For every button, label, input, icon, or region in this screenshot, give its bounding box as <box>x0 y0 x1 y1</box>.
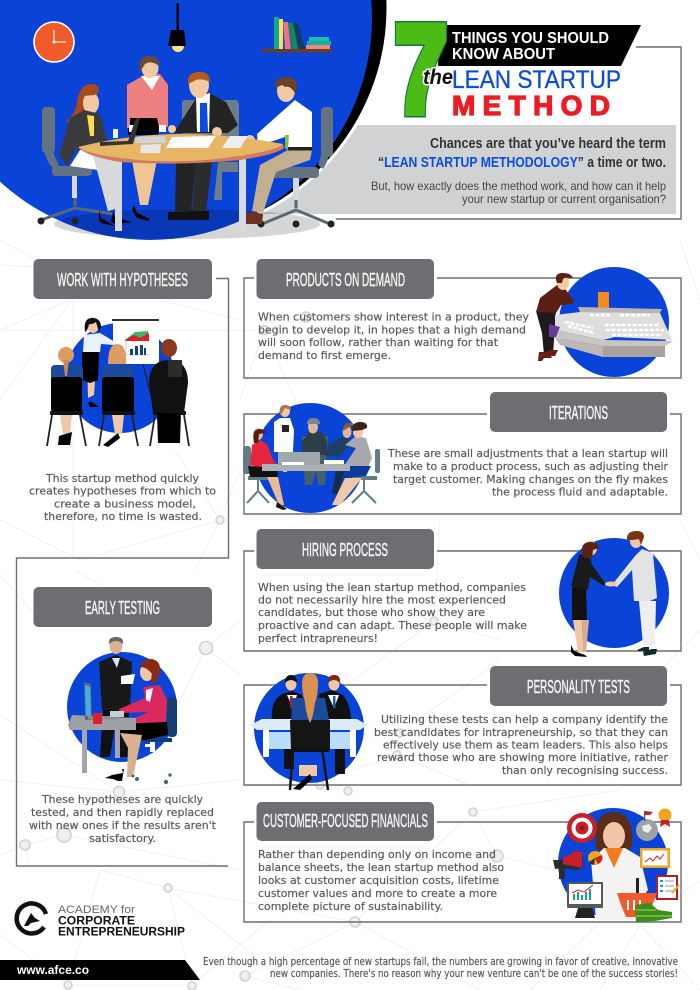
intro headline: Chances are that you’ve heard the term <box>430 136 666 152</box>
title banner: THINGS YOU SHOULD <box>452 30 609 47</box>
text: looks at customer acquisition costs, lifetime <box>258 874 499 887</box>
panel: iterations <box>243 392 681 514</box>
the script: the <box>423 66 453 89</box>
method: METHOD <box>452 90 610 121</box>
big seven: 7 <box>395 1 447 139</box>
website bar: www.afce.co <box>16 963 89 977</box>
text: therefore, no time is wasted. <box>44 510 202 523</box>
heading <box>256 529 434 569</box>
hero black arc <box>0 0 388 236</box>
text <box>374 713 668 777</box>
text: reward those who are showing more initiative, rather <box>377 751 668 764</box>
standing woman in pink <box>127 56 168 221</box>
intro question: your new startup or current organisation? <box>462 192 666 206</box>
panel: work with hypotheses <box>16 259 228 866</box>
text: with new ones if the results aren't <box>29 819 217 832</box>
icon: team meeting <box>243 403 380 513</box>
text: best candidates for intrapreneurship, so that they can <box>374 726 668 739</box>
heading <box>490 666 667 706</box>
intro headline <box>378 136 666 171</box>
heading: EARLY TESTING <box>85 598 160 618</box>
intro question <box>371 179 666 206</box>
panel: hiring process <box>244 529 681 657</box>
hero blue circle <box>0 0 372 240</box>
text: This startup method quickly <box>45 472 199 485</box>
intro question: But, how exactly does the method work, and how can it help <box>371 179 666 193</box>
wall clock <box>34 22 74 62</box>
icon: shopper at display <box>536 267 673 377</box>
heading: WORK WITH HYPOTHESES <box>57 270 188 290</box>
heading <box>490 392 667 432</box>
text: will soon follow, rather than waiting for that <box>258 336 499 349</box>
logo <box>17 903 185 938</box>
heading: ITERATIONS <box>549 403 608 423</box>
icon: presentation <box>47 317 189 447</box>
text <box>29 472 216 523</box>
text: When customers show interest in a product, they <box>258 310 529 324</box>
text: Utilizing these tests can help a company identify the <box>381 713 668 726</box>
big seven: 7 <box>395 1 447 139</box>
logo wordmark <box>58 904 185 938</box>
logo wordmark: ACADEMY for <box>58 904 135 916</box>
text <box>387 447 668 498</box>
text: effectively use them as team leaders. This also helps <box>383 738 668 752</box>
heading <box>256 259 434 299</box>
text: tested, and then rapidly replaced <box>31 806 214 819</box>
header frame <box>336 47 681 219</box>
text: proactive and can adapt. These people will make <box>258 619 527 632</box>
text: candidates, but those who show they are <box>258 606 485 619</box>
text: satisfactory. <box>89 832 156 845</box>
panel: early testing <box>29 587 217 845</box>
left chair <box>38 107 113 224</box>
panel: customer-focused financials <box>244 802 681 922</box>
icon: handshake <box>559 531 669 657</box>
floor shadow <box>54 209 320 239</box>
text: create a business model, <box>54 498 196 510</box>
logo wordmark: CORPORATE <box>58 916 135 928</box>
text <box>29 793 217 845</box>
text: than only recognising success. <box>502 764 668 777</box>
logo wordmark: ENTREPRENEURSHIP <box>58 926 185 938</box>
text: These hypotheses are quickly <box>41 793 203 806</box>
text: demand to first emerge. <box>258 349 391 362</box>
logo mark <box>17 903 46 933</box>
heading <box>256 802 434 841</box>
icon: business woman with charts <box>553 808 679 922</box>
icon: interview <box>250 673 367 790</box>
text: balance sheets, the lean startup method also <box>258 861 504 874</box>
heading: HIRING PROCESS <box>302 540 388 560</box>
panel: personality tests <box>244 666 681 790</box>
text: begin to develop it, in hopes that a high demand <box>258 324 526 336</box>
text: make to a product process, such as adjusting their <box>393 460 668 473</box>
text: creates hypotheses from which to <box>29 484 216 498</box>
text: These are small adjustments that a lean startup will <box>387 447 668 460</box>
panel: products on demand <box>244 259 681 378</box>
right chair <box>258 107 334 228</box>
book shelf <box>262 17 333 52</box>
text: customer values and more to create a more <box>258 887 497 900</box>
meeting table <box>78 118 284 231</box>
text: do not necessarily hire the most experienced <box>258 594 506 606</box>
website bar <box>0 960 200 980</box>
back chair <box>182 100 239 200</box>
heading: CUSTOMER-FOCUSED FINANCIALS <box>263 811 428 831</box>
text <box>258 581 527 645</box>
text: Rather than depending only on income and <box>258 848 496 861</box>
ceiling lamp <box>168 3 186 52</box>
closing text <box>203 956 678 980</box>
text: target customer. Making changes on the fly makes <box>393 473 668 486</box>
heading: PRODUCTS ON DEMAND <box>286 270 405 290</box>
man in black suit <box>168 72 238 220</box>
text <box>258 848 504 913</box>
text: perfect intrapreneurs! <box>258 632 378 645</box>
lean startup: LEAN STARTUP <box>452 66 621 94</box>
hero illustration <box>0 0 388 240</box>
icon: laptop at desk <box>67 637 177 784</box>
text: When using the lean startup method, companies <box>258 581 526 594</box>
heading <box>34 259 212 299</box>
heading <box>34 587 212 627</box>
text: complete picture of sustainability. <box>258 900 443 913</box>
title block <box>395 1 641 139</box>
intro headline: “LEAN STARTUP METHODOLOGY” a time or two. <box>378 155 666 171</box>
title banner: KNOW ABOUT <box>452 46 555 63</box>
text <box>258 310 529 362</box>
title banner <box>438 25 641 66</box>
intro panel <box>262 125 676 214</box>
text: the process fluid and adaptable. <box>492 486 668 498</box>
man in white shirt <box>240 77 312 224</box>
seated woman <box>59 84 132 226</box>
